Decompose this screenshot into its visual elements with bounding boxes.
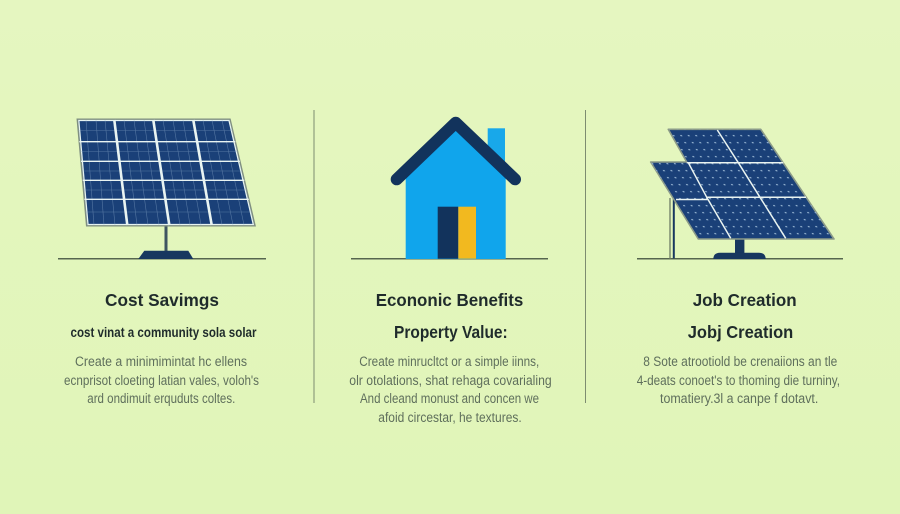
subheading: job creation: Jobj Creation: [688, 322, 793, 342]
panel: economic benefits: [349, 123, 552, 425]
heading: job creation: Job Creation: [693, 290, 797, 310]
heading: cost savings: Cost Savimgs: [105, 290, 219, 310]
text block: job creation description: 4-deats conoet's to thoming die turniny,: [637, 373, 840, 388]
text block: cost savings description: ecnprisot cloeting latian vales, voloh's: [64, 373, 259, 388]
text block: economic benefits description: Create minrucltct or a simple iinns,: [359, 354, 539, 369]
panel: cost savings: [58, 119, 266, 406]
text block: cost savings description: [64, 354, 259, 406]
heading: economic benefits: Econonic Benefits: [376, 290, 524, 310]
icon: solar panel on stand: [58, 119, 266, 259]
text block: job creation description: [637, 354, 840, 406]
text block: economic benefits description: [349, 354, 552, 425]
text block: job creation description: tomatiery.3l a canpe f dotavt.: [660, 391, 818, 406]
text block: cost savings description: ard ondimuit erquduts coltes.: [87, 391, 235, 406]
subheading: property value: Property Value:: [394, 322, 508, 342]
text block: job creation description: 8 Sote atrootiold be crenaiions an tle: [643, 354, 837, 369]
text block: economic benefits description: afoid circestar, he textures.: [378, 410, 522, 425]
icon: tilted solar array: [637, 129, 843, 259]
icon: house: [351, 123, 548, 259]
panel: job creation: [637, 129, 843, 406]
text block: cost savings description: Create a minimimintat hc ellens: [75, 354, 247, 369]
subheading: community solar: cost vinat a community sola solar: [70, 325, 257, 340]
text block: economic benefits description: And cleand monust and concen we: [360, 391, 539, 406]
text block: economic benefits description: olr otolations, shat rehaga covarialing: [349, 373, 552, 388]
